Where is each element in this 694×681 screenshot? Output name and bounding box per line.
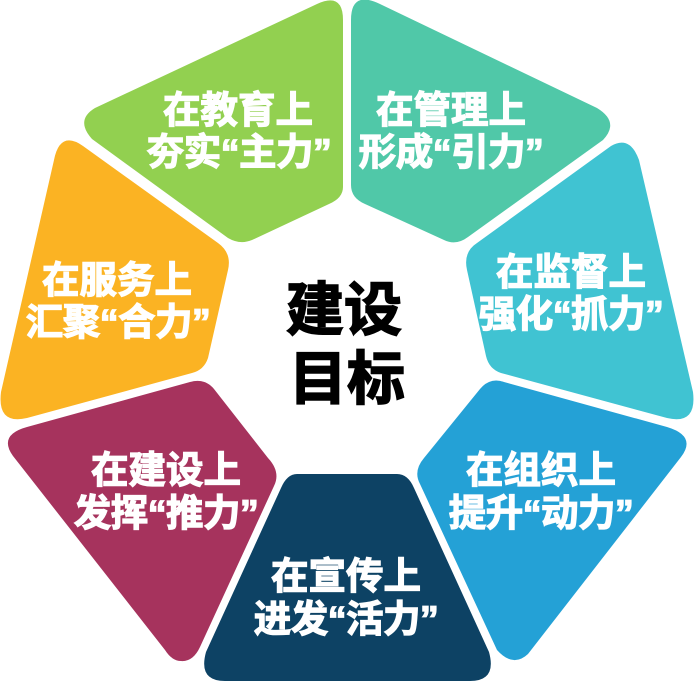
panel: publicity (navy) bbox=[204, 474, 491, 681]
panel: publicity (navy): 进发“活力” bbox=[254, 598, 438, 640]
title: center heading bbox=[286, 278, 405, 412]
panel: management (teal green): 形成“引力” bbox=[359, 131, 543, 173]
title: center heading: 建设 bbox=[286, 278, 402, 343]
panel: management (teal green) bbox=[351, 0, 610, 242]
panel: construction (crimson): 发挥“推力” bbox=[74, 492, 258, 534]
panel: construction (crimson): 在建设上 bbox=[91, 449, 241, 491]
title: center heading: 目标 bbox=[289, 347, 405, 412]
panel: service (orange): 在服务上 bbox=[42, 259, 192, 301]
panel: education (green): 在教育上 bbox=[163, 89, 313, 131]
panel: management (teal green): 在管理上 bbox=[376, 89, 526, 131]
panel: publicity (navy): 在宣传上 bbox=[271, 555, 421, 597]
panel: service (orange) bbox=[1, 140, 229, 419]
panel: organization (blue): 在组织上 bbox=[466, 449, 616, 491]
panel: organization (blue): 提升“动力” bbox=[449, 492, 633, 534]
panel: supervision (cyan) bbox=[466, 143, 693, 419]
panel: organization (blue) bbox=[417, 381, 687, 660]
panel: construction (crimson) bbox=[8, 381, 276, 661]
panel: supervision (cyan): 在监督上 bbox=[496, 251, 646, 293]
panel: supervision (cyan): 强化“抓力” bbox=[479, 293, 663, 335]
panel: education (green): 夯实“主力” bbox=[147, 131, 331, 173]
panel: education (green) bbox=[84, 0, 343, 242]
panel: service (orange): 汇聚“合力” bbox=[26, 301, 210, 343]
